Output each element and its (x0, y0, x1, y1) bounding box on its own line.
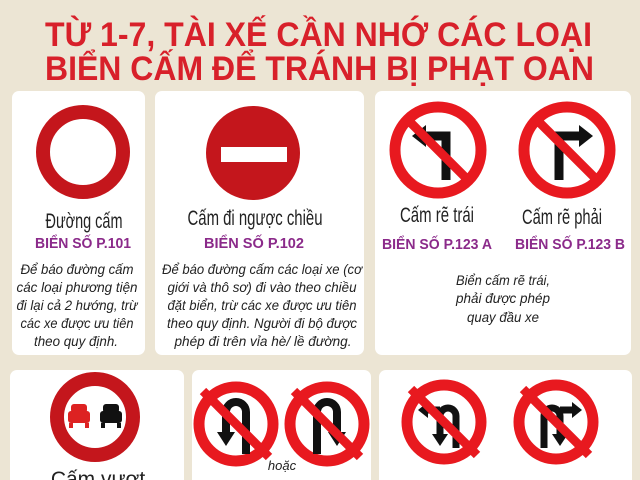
panel: cấm vượt (10, 370, 184, 480)
title: TỪ 1-7, TÀI XẾ CẦN NHỚ CÁC LOẠI (45, 16, 592, 54)
icon: đường cấm sign (43, 112, 123, 192)
text block: description: theo quy định. (34, 333, 118, 349)
icon: no U-turn right (290, 387, 364, 461)
code: P.123 A: BIỂN SỐ P.123 A (382, 235, 492, 253)
icon: no U-turn left (199, 387, 273, 461)
heading: Cấm rẽ trái: Cấm rẽ trái (400, 204, 474, 227)
icon: no left turn (395, 107, 481, 193)
title: BIỂN CẤM ĐỂ TRÁNH BỊ PHẠT OAN (45, 50, 594, 88)
code: P.123 B: BIỂN SỐ P.123 B (515, 235, 625, 253)
text block: description: theo quy định. Người đi bộ được (167, 315, 357, 331)
panel: cấm quay đầu (192, 370, 371, 480)
title (45, 16, 594, 88)
heading: Cấm rẽ phải: Cấm rẽ phải (522, 206, 602, 229)
text block: description: Biển cấm rẽ trái, (456, 272, 550, 288)
heading: Đường cấm: Đường cấm (46, 210, 122, 233)
text block: description: Để báo đường cấm các loại xe (cơ (162, 261, 363, 277)
text block: description: các loại phương tiện (16, 279, 138, 295)
panel: cấm đi ngược chiều (155, 91, 364, 355)
icon: no entry sign (206, 106, 300, 200)
text block: description: giới và thô sơ) đi vào theo chiều (168, 279, 357, 295)
icon: no right turn and U-turn (519, 385, 593, 459)
text block: description: quay đầu xe (467, 309, 539, 325)
text block: description (16, 261, 139, 349)
icon: no left turn and U-turn (407, 385, 481, 459)
text block: description (455, 272, 550, 325)
text: hoặc: hoặc (268, 458, 297, 473)
text block: description: phải được phép (455, 290, 550, 306)
panel: đường cấm (12, 91, 145, 355)
panel: cấm rẽ và quay đầu (379, 370, 632, 480)
text block: description: đi lại cả 2 hướng, trừ (16, 297, 139, 313)
text block: description: đặt biển, trừ các xe được ưu tiên (168, 297, 357, 313)
icon: no overtaking sign (57, 379, 133, 455)
code: P.102: BIỂN SỐ P.102 (204, 234, 304, 252)
text block: description: các xe được ưu tiên (20, 315, 134, 331)
text block: description: Để báo đường cấm (20, 261, 134, 277)
panel: cấm rẽ trái / phải (375, 91, 631, 355)
heading: Cấm đi ngược chiều: Cấm đi ngược chiều (188, 207, 322, 230)
icon: no right turn (524, 107, 610, 193)
text block: description: phép đi trên vỉa hè/ lề đường. (174, 333, 352, 349)
code: P.101: BIỂN SỐ P.101 (35, 234, 131, 252)
text block: description (162, 261, 363, 349)
